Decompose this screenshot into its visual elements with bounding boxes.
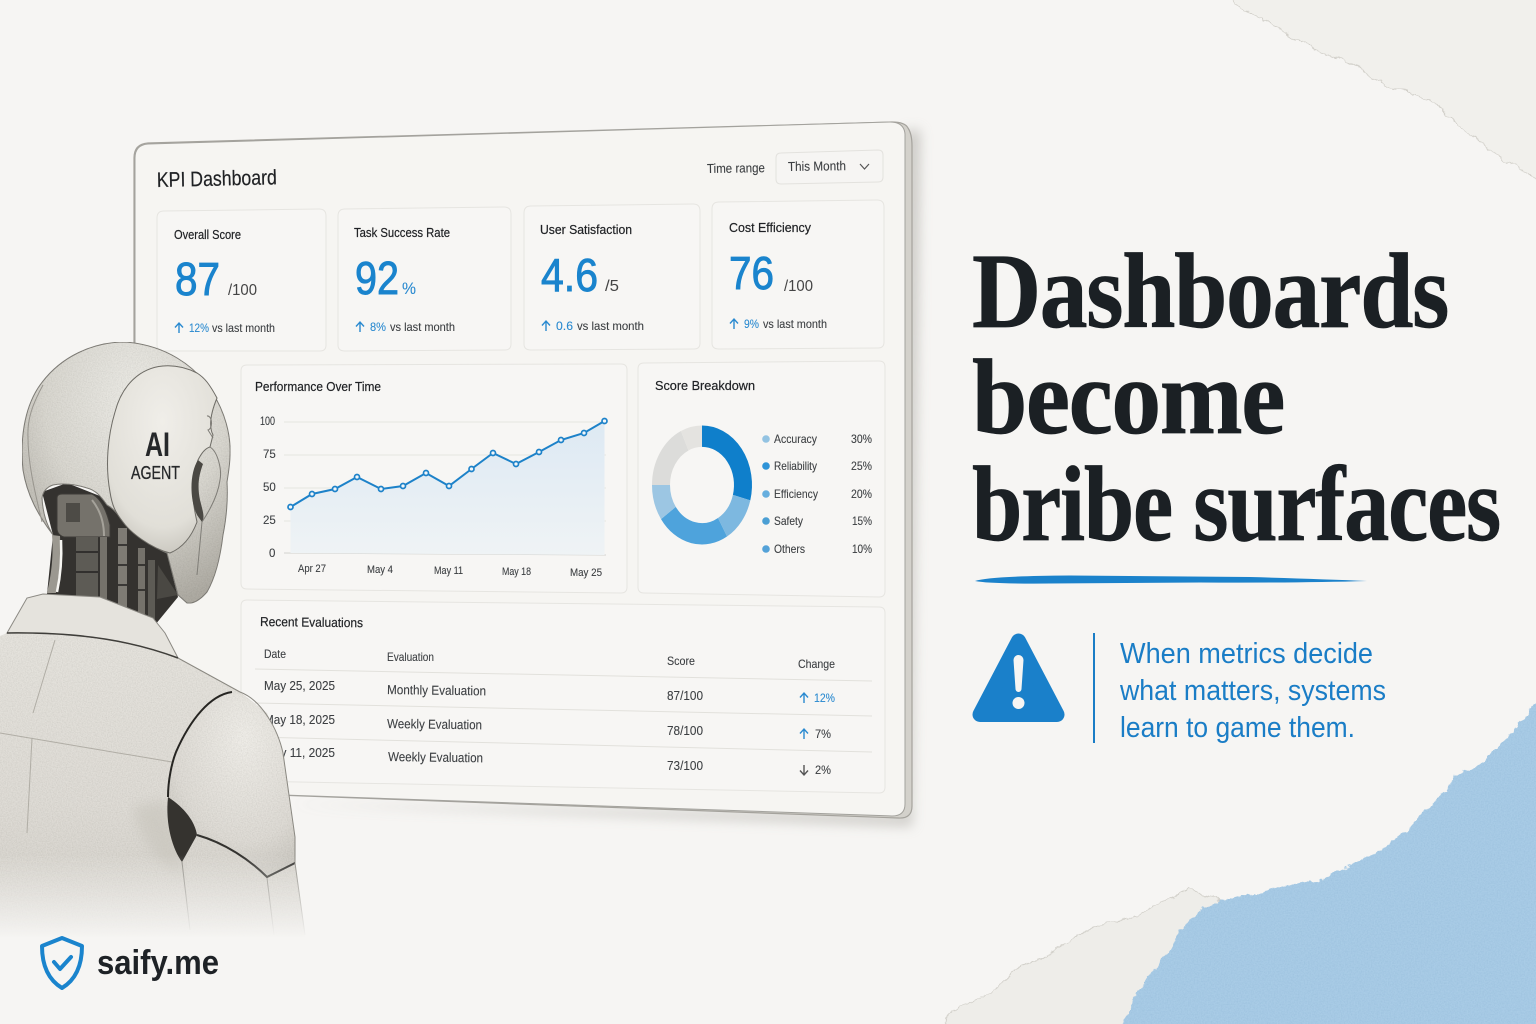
robot head: [22, 342, 230, 603]
table row 1: Monthly Evaluation: [387, 682, 486, 698]
KPI card: task success rate: [338, 207, 511, 351]
robot neck mechanics: [42, 483, 178, 625]
line chart: 100: [260, 416, 275, 428]
panel: score breakdown: Score Breakdown: [655, 378, 755, 393]
KPI card: user satisfaction: User Satisfaction: [540, 223, 632, 237]
panel: recent evaluations table: Recent Evaluations: [260, 614, 364, 630]
table row 3: Weekly Evaluation: [388, 749, 483, 765]
robot dome seam: [28, 385, 43, 522]
callout text: [1119, 638, 1386, 744]
panel: performance over time: [241, 364, 627, 593]
KPI card: user satisfaction: 0.6: [556, 319, 573, 333]
head label: AI AGENT: AGENT: [131, 462, 180, 483]
torn paper: bottom grey layer: [938, 887, 1226, 1024]
donut legend: [762, 432, 872, 556]
line chart: Apr 27: [298, 563, 326, 575]
time range selector: Time range: [707, 160, 765, 176]
donut legend: Safety: [774, 514, 803, 528]
line chart: 25: [263, 515, 276, 527]
panel face: [135, 122, 905, 816]
torn paper: top right: [1225, 0, 1536, 184]
robot face plate: [108, 366, 217, 553]
KPI card: overall score: vs last month: [212, 321, 275, 335]
KPI card: task success rate: 92: [355, 252, 399, 304]
KPI card: overall score: Overall Score: [174, 228, 241, 242]
table row 3: 2%: [815, 763, 831, 777]
robot body: [0, 594, 306, 945]
KPI card: cost efficiency: 9%: [744, 317, 759, 331]
table header: Score: [667, 654, 695, 668]
donut legend: Others: [774, 542, 805, 556]
KPI card: overall score: /100: [228, 282, 257, 299]
table header: Date: [264, 647, 286, 661]
KPI card: cost efficiency: Cost Efficiency: [729, 221, 812, 235]
table row 2: 78/100: [667, 723, 703, 738]
table row 1: 87/100: [667, 688, 703, 703]
icon: warning triangle: [980, 641, 1057, 714]
table row 1: [264, 678, 835, 705]
head label: AI AGENT: [131, 426, 180, 483]
headline: Dashboards: [972, 233, 1448, 351]
line chart: 50: [263, 482, 276, 494]
donut legend: 25%: [851, 459, 872, 473]
donut legend: 15%: [852, 514, 872, 528]
panel frame: [134, 122, 912, 818]
table row 2: Weekly Evaluation: [387, 716, 482, 732]
panel: recent evaluations table: [241, 600, 885, 793]
KPI card: user satisfaction: 4.6: [541, 249, 598, 301]
panel shadow: [290, 130, 920, 826]
robot AI agent: [0, 342, 306, 945]
logo: saify.me: [42, 938, 219, 988]
KPI card: user satisfaction: [524, 204, 700, 350]
KPI card: overall score: 12%: [189, 321, 209, 335]
table row 3: [264, 745, 831, 777]
table row 1: 12%: [814, 691, 835, 705]
line chart: 75: [263, 449, 276, 461]
KPI card: cost efficiency: [712, 200, 884, 349]
table header: [264, 647, 835, 671]
KPI card: cost efficiency: /100: [784, 278, 813, 295]
KPI card: task success rate: %: [402, 279, 416, 298]
dashboard title: KPI Dashboard: [157, 166, 277, 192]
donut legend: 10%: [852, 542, 872, 556]
KPI card: task success rate: vs last month: [390, 320, 455, 334]
head label: AI AGENT: AI: [145, 426, 170, 464]
time range selector: [707, 150, 883, 184]
line chart: May 11: [434, 565, 463, 577]
dashboard panel: [134, 122, 920, 826]
donut legend: Efficiency: [774, 487, 818, 501]
KPI card: task success rate: Task Success Rate: [354, 226, 450, 240]
table row 1: May 25, 2025: [264, 678, 335, 693]
donut legend: 20%: [851, 487, 872, 501]
line chart: May 18: [502, 566, 531, 578]
donut legend: Reliability: [774, 459, 817, 473]
line chart: May 25: [570, 567, 602, 579]
KPI card: cost efficiency: vs last month: [763, 317, 827, 331]
table row 2: May 18, 2025: [264, 712, 335, 727]
KPI card: overall score: [157, 209, 326, 351]
panel: score breakdown: [638, 361, 885, 597]
callout divider: [1093, 633, 1095, 743]
table header: Evaluation: [387, 650, 434, 664]
table row 3: 73/100: [667, 758, 703, 773]
table row 2: [264, 712, 831, 741]
robot ear slot: [191, 460, 203, 522]
table row 2: 7%: [815, 727, 831, 741]
logo: saify.me: saify.me: [97, 944, 219, 982]
headline: [972, 233, 1500, 564]
panel: performance over time: Performance Over Time: [255, 379, 381, 394]
line chart: 0: [269, 548, 275, 560]
KPI card: user satisfaction: /5: [605, 278, 619, 295]
callout text: learn to game them.: [1120, 712, 1355, 744]
icon: shield check: [42, 938, 82, 988]
blue brush underline: [975, 576, 1367, 584]
callout text: what matters, systems: [1119, 675, 1386, 707]
callout text: When metrics decide: [1120, 638, 1373, 670]
line chart: [260, 416, 607, 579]
headline: become: [972, 339, 1284, 457]
donut legend: 30%: [851, 432, 872, 446]
time range selector: This Month: [788, 158, 846, 174]
donut legend: Accuracy: [774, 432, 817, 446]
KPI card: cost efficiency: 76: [729, 247, 774, 299]
donut chart: [661, 436, 743, 534]
line chart: May 4: [367, 564, 393, 576]
torn paper: blue layer: [1120, 696, 1536, 1024]
KPI card: user satisfaction: vs last month: [577, 319, 644, 333]
table row 3: May 11, 2025: [264, 745, 335, 760]
KPI card: task success rate: 8%: [370, 320, 386, 334]
KPI card: overall score: 87: [175, 253, 220, 305]
table header: Change: [798, 657, 835, 671]
